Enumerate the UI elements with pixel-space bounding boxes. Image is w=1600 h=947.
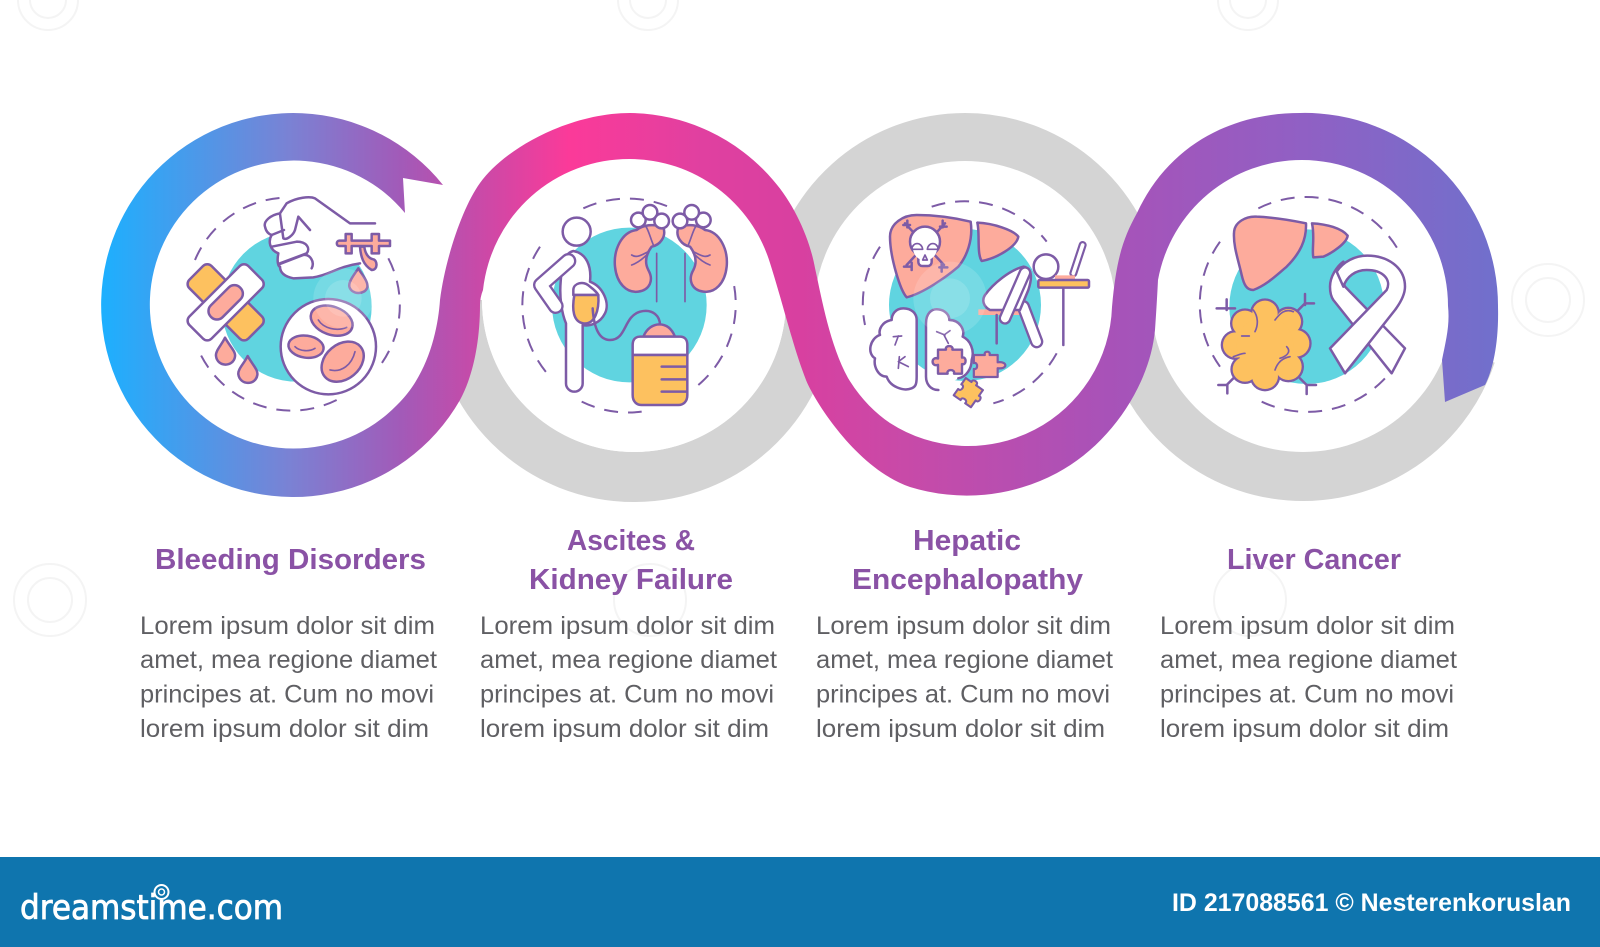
text block: hepatic encephalopathy — [816, 612, 1113, 743]
text block: bleeding disorders: amet, mea regione diamet — [140, 646, 437, 674]
icon: hepatic encephalopathy — [863, 201, 1089, 409]
text block: bleeding disorders: Lorem ipsum dolor sit dim — [140, 612, 435, 640]
grey ring segments: lower arcs — [457, 300, 1471, 477]
text block: liver cancer: amet, mea regione diamet — [1160, 646, 1457, 674]
text block: bleeding disorders: principes at. Cum no movi — [140, 680, 434, 708]
heading: ascites and kidney failure: Ascites & — [567, 525, 695, 557]
heading: hepatic encephalopathy: Hepatic — [913, 525, 1021, 557]
text block: bleeding disorders: lorem ipsum dolor sit dim — [140, 715, 429, 743]
text block: ascites and kidney failure: Lorem ipsum dolor sit dim — [480, 612, 775, 640]
text block: liver cancer: Lorem ipsum dolor sit dim — [1160, 612, 1455, 640]
footer bar: ID 217088561 © Nesterenkoruslan — [1172, 889, 1571, 917]
icon: ascites and kidney failure — [522, 199, 736, 413]
text block: ascites and kidney failure: lorem ipsum dolor sit dim — [480, 715, 769, 743]
heading: liver cancer: Liver Cancer — [1227, 544, 1401, 576]
text block: ascites and kidney failure: amet, mea regione diamet — [480, 646, 777, 674]
text block: hepatic encephalopathy: lorem ipsum dolor sit dim — [816, 715, 1105, 743]
text block: hepatic encephalopathy: amet, mea regione diamet — [816, 646, 1113, 674]
text block: ascites and kidney failure — [480, 612, 777, 743]
gradient ribbon with arrow — [101, 113, 1498, 497]
text block: hepatic encephalopathy: principes at. Cum no movi — [816, 680, 1110, 708]
footer bar: dreamstime.com — [20, 888, 283, 928]
text block: liver cancer — [1160, 612, 1457, 743]
heading: hepatic encephalopathy — [852, 525, 1083, 596]
icon: bleeding disorders — [185, 197, 400, 411]
watermark spirals — [14, 0, 1584, 636]
text block: bleeding disorders — [140, 612, 437, 743]
heading: ascites and kidney failure: Kidney Failure — [529, 564, 733, 596]
heading: ascites and kidney failure — [529, 525, 733, 596]
heading: hepatic encephalopathy: Encephalopathy — [852, 564, 1083, 596]
grey ring segment: upper arc — [791, 137, 1139, 293]
text block: hepatic encephalopathy: Lorem ipsum dolor sit dim — [816, 612, 1111, 640]
text block: liver cancer: principes at. Cum no movi — [1160, 680, 1454, 708]
white interiors: circles one and three — [137, 149, 1121, 468]
footer bar — [0, 857, 1600, 947]
text block: liver cancer: lorem ipsum dolor sit dim — [1160, 715, 1449, 743]
text block: ascites and kidney failure: principes at. Cum no movi — [480, 680, 774, 708]
icon: liver cancer — [1200, 197, 1405, 412]
white interiors: circles two and four — [482, 148, 1455, 452]
heading: bleeding disorders: Bleeding Disorders — [155, 544, 426, 576]
